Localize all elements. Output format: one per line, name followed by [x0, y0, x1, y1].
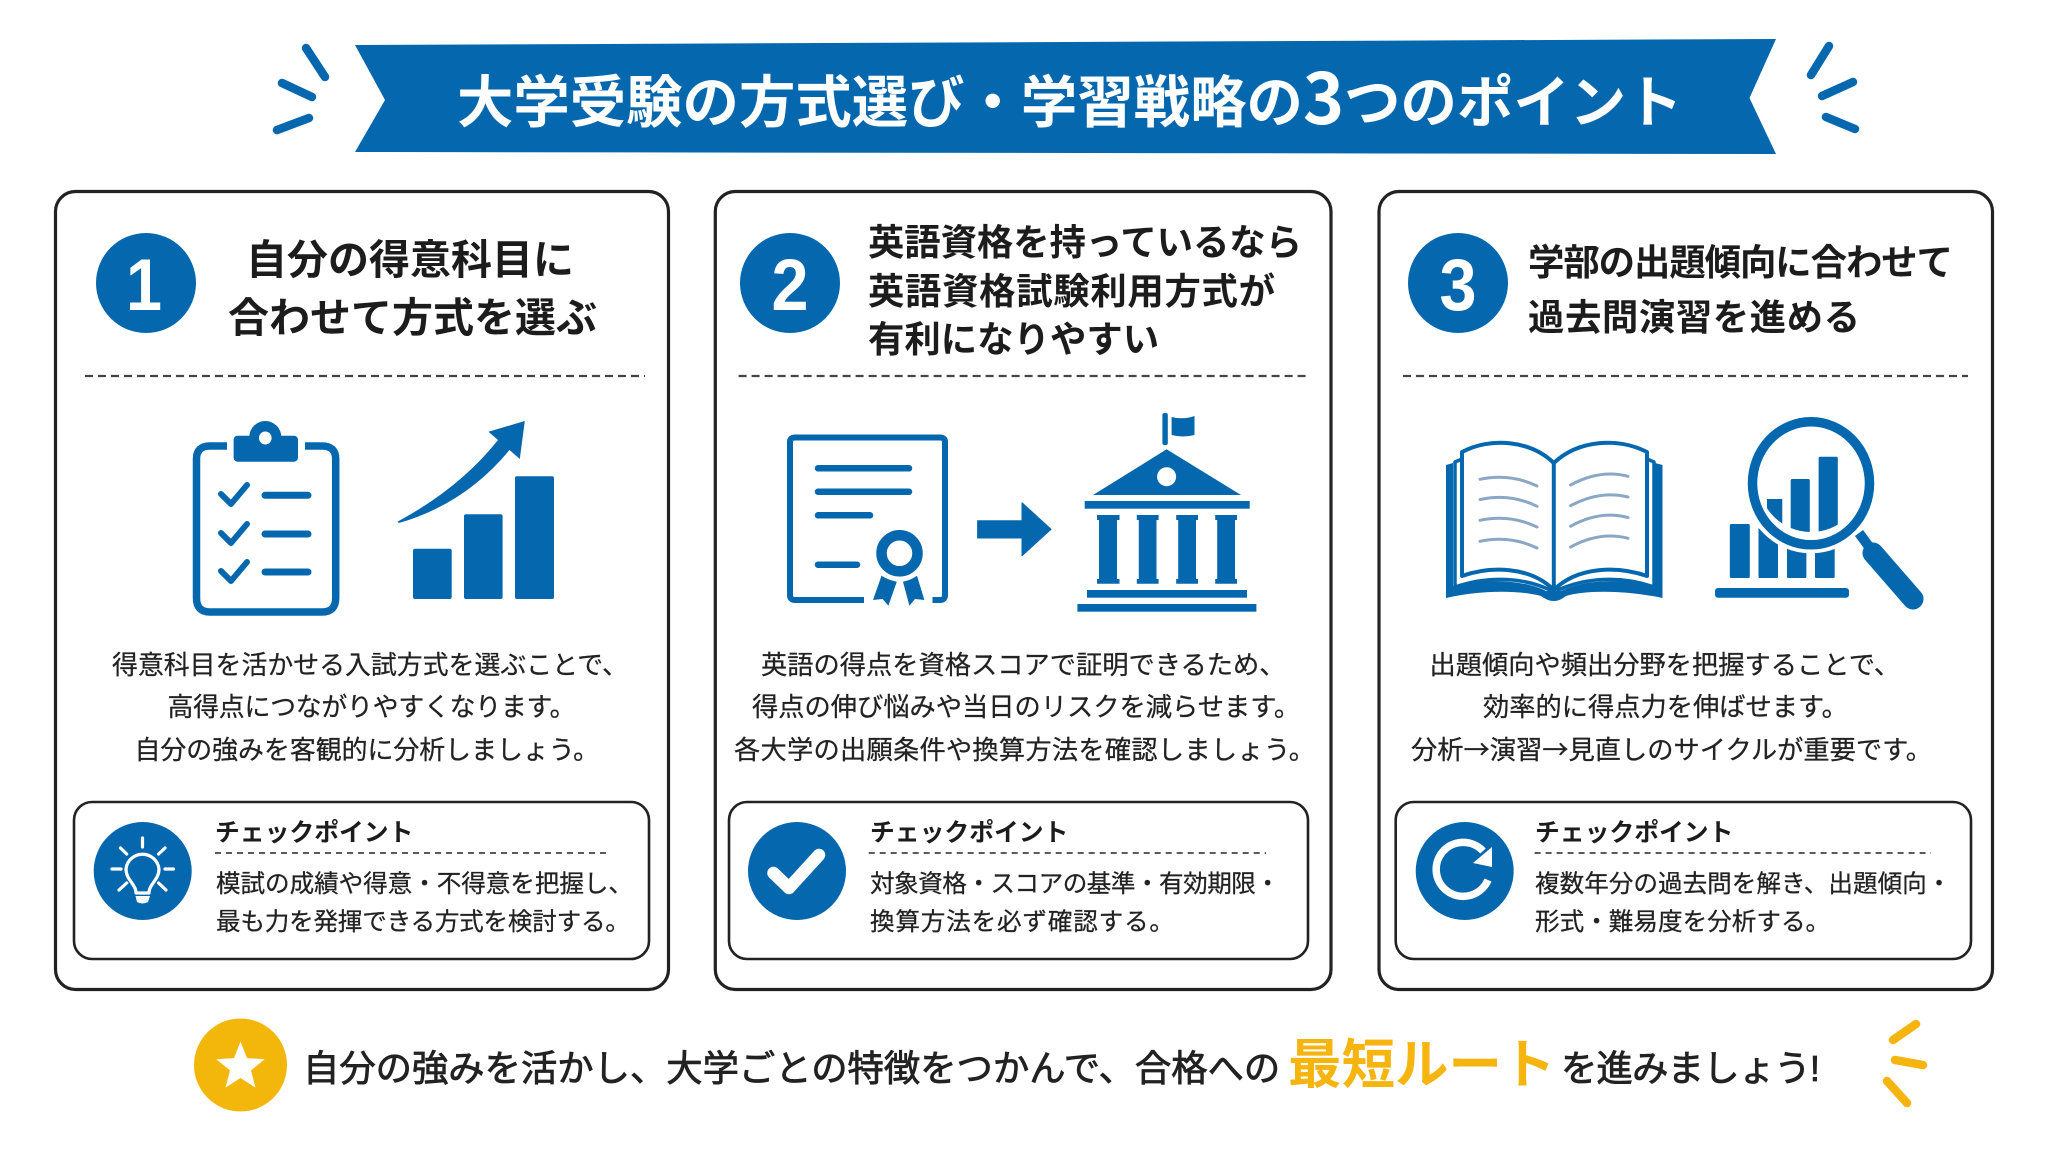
number badge 1 — [96, 233, 196, 333]
checkpoint title 3: チェックポイント — [1535, 819, 1733, 847]
icon: rising bar chart with arrow — [397, 421, 554, 599]
icon: clipboard checklist — [196, 421, 336, 612]
heading 1: 自分の得意科目に — [246, 237, 574, 283]
description 2: 得点の伸び悩みや当日のリスクを減らせます。 — [752, 692, 1300, 722]
description 1: 得意科目を活かせる入試方式を選ぶことで、 — [112, 651, 628, 680]
footer text — [303, 1036, 1820, 1095]
title banner: 3 — [1303, 44, 1344, 145]
panel: point 3 — [1379, 192, 1992, 990]
icon: cycle arrow — [1416, 822, 1514, 920]
description 1: 自分の強みを客観的に分析しましょう。 — [134, 736, 599, 765]
checkpoint text 3: 形式・難易度を分析する。 — [1535, 908, 1830, 936]
icon: right title sparks — [1811, 46, 1855, 129]
footer text: を進みましょう! — [1561, 1048, 1820, 1089]
checkpoint title 1: チェックポイント — [215, 819, 413, 847]
icon: university building — [1077, 413, 1256, 612]
checkpoint text 3 — [1535, 870, 1951, 936]
description 2: 英語の得点を資格スコアで証明できるため、 — [761, 650, 1285, 680]
icon: light bulb — [94, 822, 192, 920]
heading 2: 有利になりやすい — [868, 319, 1159, 360]
footer text: 自分の強みを活かし、大学ごとの特徴をつかんで、合格への — [303, 1048, 1280, 1089]
icon: magnifier over bar chart — [1715, 413, 1913, 599]
checkpoint box 3 — [1396, 802, 1971, 959]
checkpoint box 2 — [729, 802, 1308, 959]
panel: point 2 — [715, 192, 1331, 990]
description 1: 高得点につながりやすくなります。 — [168, 693, 576, 722]
heading 1: 合わせて方式を選ぶ — [228, 295, 597, 341]
checkpoint text 1: 模試の成績や得意・不得意を把握し、 — [216, 870, 633, 898]
checkpoint text 3: 複数年分の過去問を解き、出題傾向・ — [1535, 870, 1951, 898]
title banner: つのポイント — [1344, 71, 1683, 134]
description 3: 出題傾向や頻出分野を把握することで、 — [1430, 650, 1900, 680]
footer text: 最短ルート — [1288, 1036, 1556, 1095]
checkpoint title 2: チェックポイント — [870, 819, 1068, 847]
icon: star badge — [194, 1018, 287, 1112]
icon: open book — [1446, 443, 1662, 601]
heading 3 — [1528, 242, 1953, 338]
checkpoint text 2 — [870, 870, 1280, 936]
description 2 — [734, 650, 1315, 765]
icon: certificate — [790, 438, 945, 606]
number badge 2: 2 — [772, 245, 808, 326]
number badge 1: 1 — [126, 245, 162, 326]
checkpoint text 2: 対象資格・スコアの基準・有効期限・ — [870, 870, 1280, 898]
number badge 2 — [740, 233, 840, 333]
heading 3: 学部の出題傾向に合わせて — [1528, 242, 1953, 283]
description 3: 効率的に得点力を伸ばせます。 — [1483, 692, 1848, 722]
heading 3: 過去問演習を進める — [1528, 297, 1860, 338]
heading 2 — [868, 222, 1302, 360]
description 1 — [112, 651, 628, 765]
icon: check mark — [748, 822, 846, 920]
heading 1 — [228, 237, 597, 341]
number badge 3 — [1408, 233, 1508, 333]
description 3: 分析→演習→見直しのサイクルが重要です。 — [1411, 729, 1932, 767]
description 2: 各大学の出願条件や換算方法を確認しましょう。 — [734, 735, 1315, 765]
footer message — [194, 1018, 1923, 1112]
arrow: certificate to university — [978, 503, 1051, 556]
heading 2: 英語資格を持っているなら — [868, 222, 1302, 263]
title banner — [355, 39, 1776, 154]
title banner: 大学受験の方式選び・学習戦略の — [457, 71, 1303, 134]
heading 2: 英語資格試験利用方式が — [868, 271, 1275, 312]
description 3 — [1411, 650, 1932, 767]
icon: left title sparks — [277, 48, 325, 130]
number badge 3: 3 — [1440, 245, 1476, 326]
checkpoint text 2: 換算方法を必ず確認する。 — [870, 908, 1174, 936]
icon: footer sparks — [1887, 1024, 1923, 1103]
checkpoint text 1 — [216, 870, 633, 936]
panel: point 1 — [56, 192, 668, 990]
checkpoint box 1 — [74, 802, 649, 959]
checkpoint text 1: 最も力を発揮できる方式を検討する。 — [216, 908, 630, 936]
